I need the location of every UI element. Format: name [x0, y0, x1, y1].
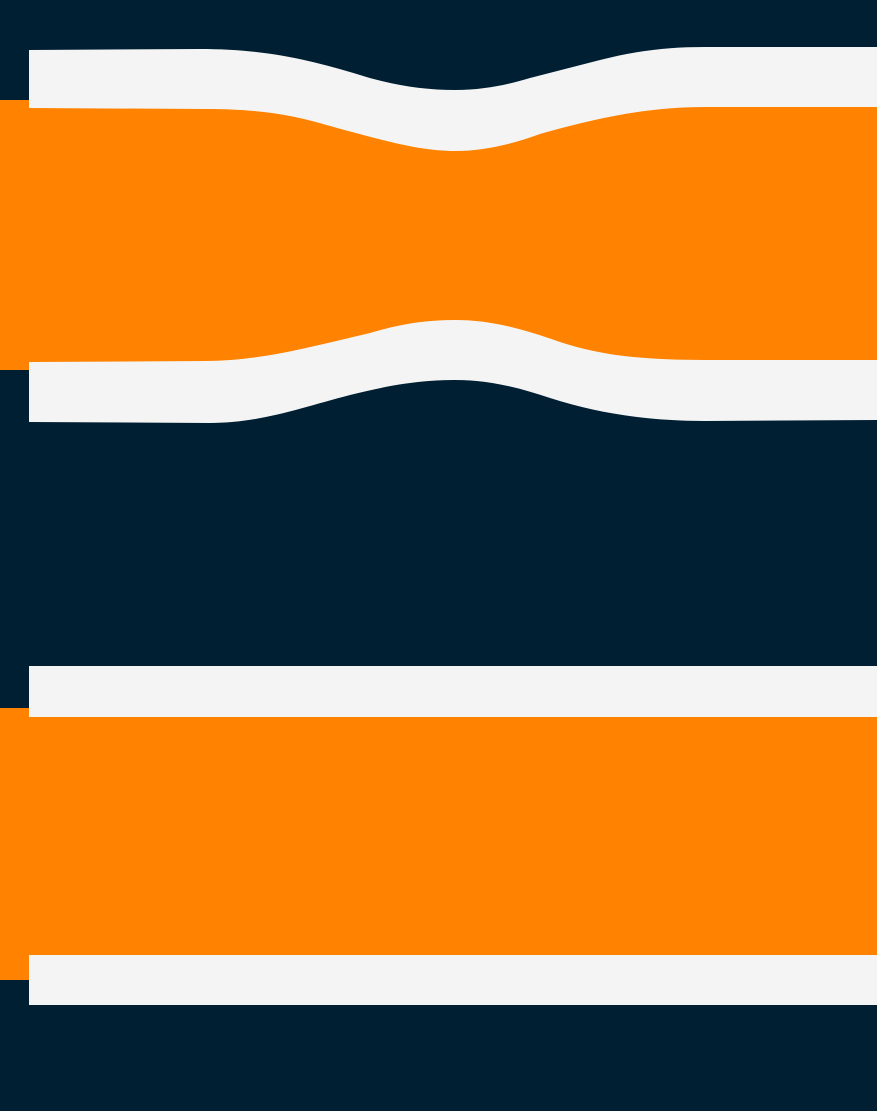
stripe: bottom-section lower white band [29, 955, 877, 1005]
wave: top white band [29, 47, 877, 151]
wave: lower white band [29, 320, 877, 423]
panel: top wavy orange band [0, 47, 877, 423]
stripe: bottom-section upper white band [29, 666, 877, 717]
panel: bottom straight orange band [0, 666, 877, 1005]
